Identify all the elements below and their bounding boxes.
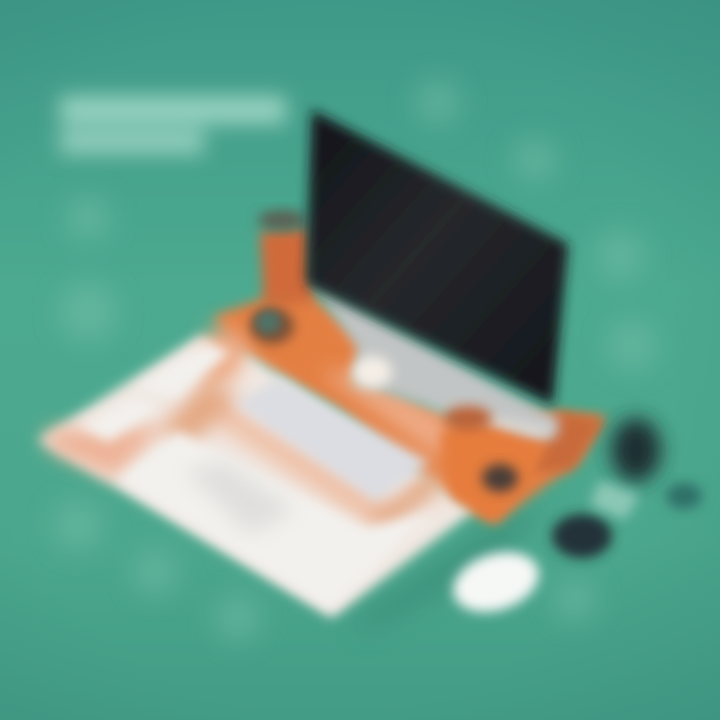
keyboard xyxy=(234,378,430,502)
bright reflection on base xyxy=(352,356,392,388)
orange base layer xyxy=(214,285,606,524)
white cards on the sheet xyxy=(78,342,435,610)
board shadow xyxy=(350,495,550,630)
paper sheet board xyxy=(38,335,475,618)
white mouse xyxy=(446,542,546,622)
faint floating icons xyxy=(54,80,656,640)
dark green mug xyxy=(250,308,294,344)
sheet detail lines xyxy=(185,462,295,535)
pale tile xyxy=(590,480,640,520)
peach edge bands xyxy=(44,322,458,535)
dark devices on right xyxy=(611,418,661,482)
orange block with dark objects xyxy=(440,420,548,522)
laptop base xyxy=(312,284,560,442)
dark orange right block xyxy=(530,410,604,472)
title placeholder: blurred heading bars xyxy=(60,96,286,154)
orange cup behind laptop xyxy=(258,210,312,304)
laptop screen xyxy=(306,110,568,405)
